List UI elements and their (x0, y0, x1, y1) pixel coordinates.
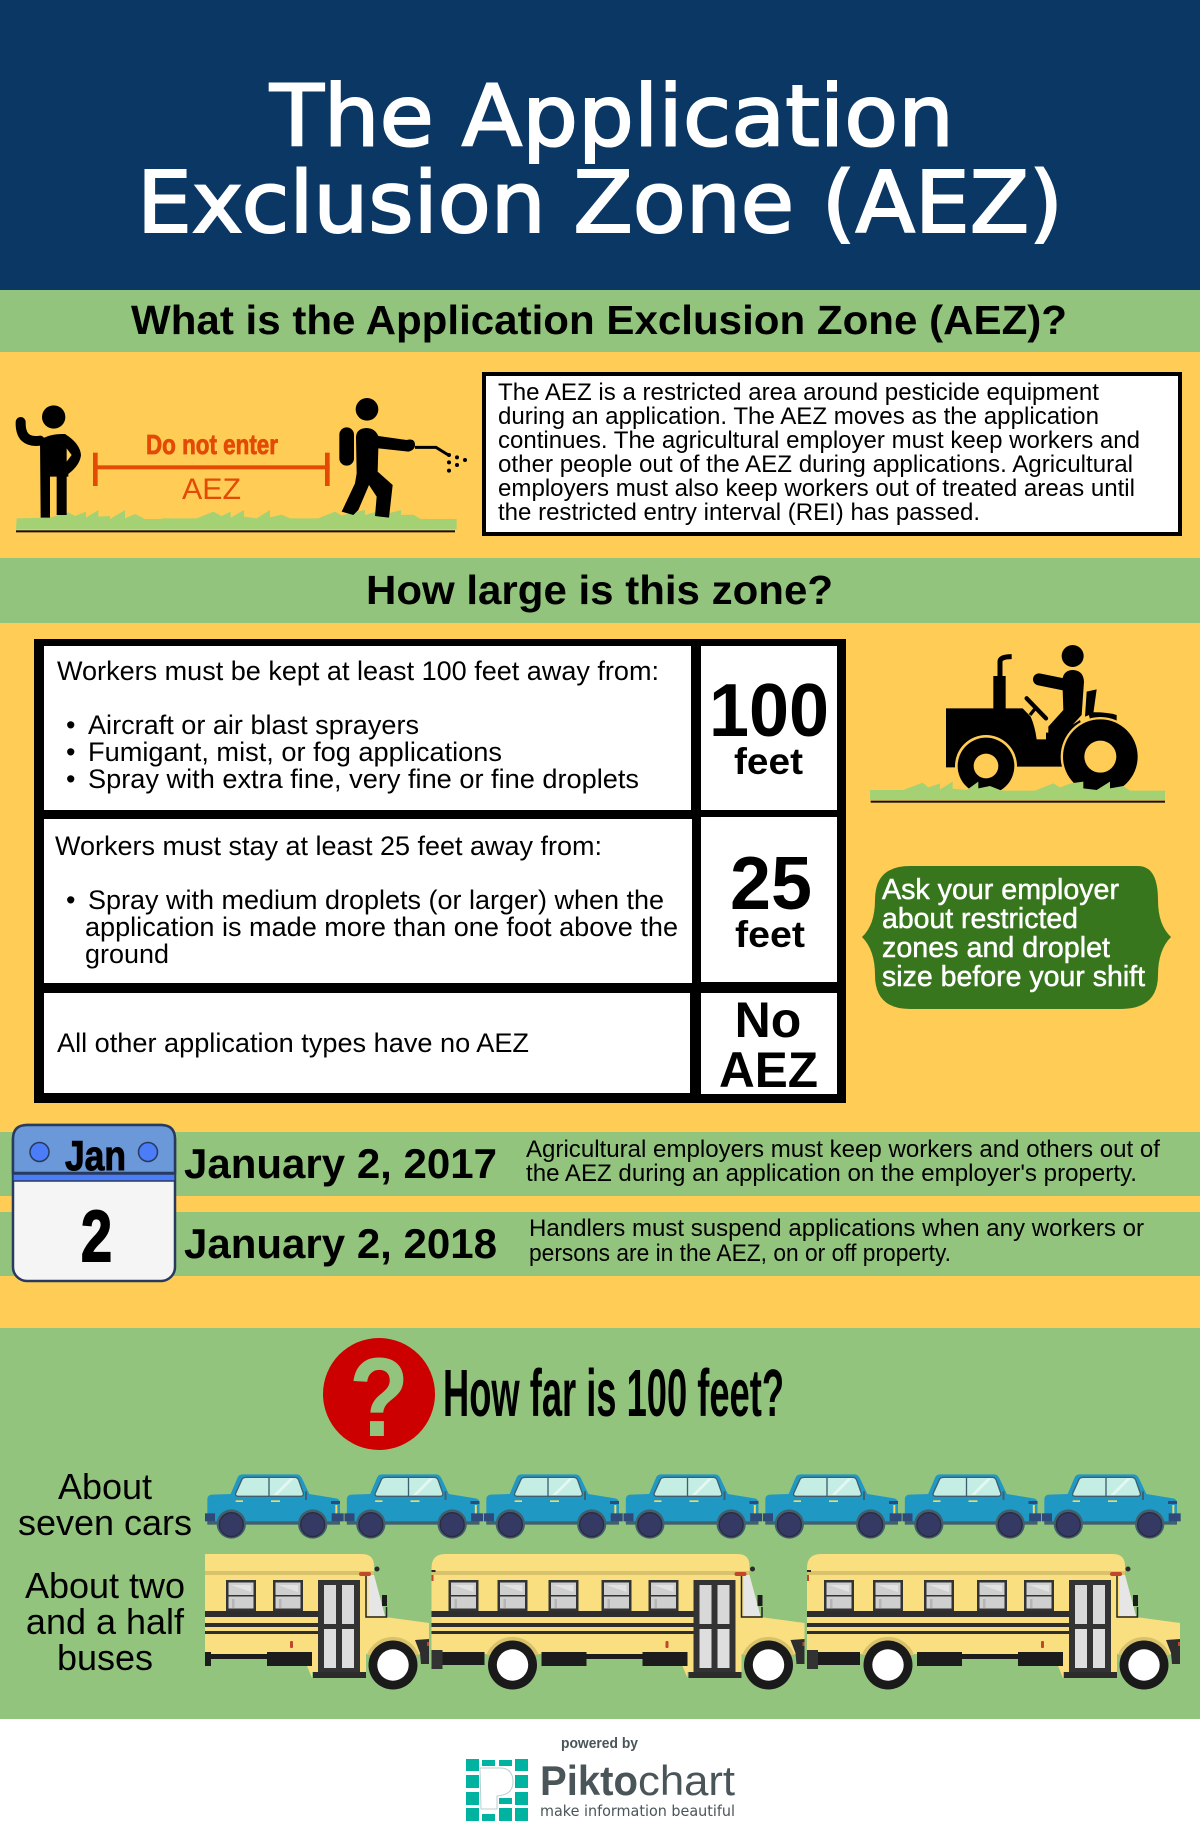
row: 100 feet: • (66, 737, 75, 767)
icon: calendar: 2 (81, 1197, 112, 1277)
footer: Piktochart: Pikto (540, 1757, 638, 1804)
band: January 2, 2018: January 2, 2018 (184, 1220, 497, 1267)
row: 25 feet: Spray with medium droplets (or larger) when the (88, 885, 664, 915)
row: 100 feet: • (66, 710, 75, 740)
row: 100 feet: feet (734, 741, 803, 782)
band: January 2, 2017: the AEZ during an application on the employer's property. (526, 1160, 1137, 1187)
row: 100 feet: Workers must be kept at least 100 feet away from: (57, 656, 659, 686)
row: 25 feet (44, 817, 837, 983)
panel: zone sizes (0, 623, 1200, 1328)
panel: AEZ definition (0, 352, 1200, 558)
text box: AEZ definition: during an application. The AEZ moves as the application (498, 403, 1099, 430)
band: January 2, 2018 (0, 1212, 1200, 1276)
row: two and a half buses (205, 1554, 1180, 1690)
icon: Piktochart logo (466, 1759, 528, 1821)
band: January 2, 2018: Handlers must suspend applications when any workers or (529, 1215, 1144, 1242)
row: 100 feet: 100 (709, 668, 829, 752)
heading: how far: How far is 100 feet? (443, 1356, 784, 1431)
title: The Application (269, 68, 954, 166)
row: 25 feet: • (66, 885, 75, 915)
footer: Piktochart: powered by (561, 1735, 639, 1752)
panel: what is the AEZ heading (0, 290, 1200, 352)
callout: ask your employer: about restricted (882, 903, 1078, 935)
label: about seven cars: About (58, 1466, 152, 1507)
text box: AEZ definition: The AEZ is a restricted area around pesticide equipment (498, 379, 1099, 406)
row: 25 feet: feet (735, 914, 805, 955)
text box: AEZ definition: other people out of the AEZ during applications. Agricultural (498, 451, 1133, 478)
row: 100 feet (44, 646, 837, 810)
callout: ask your employer: Ask your employer (882, 874, 1119, 906)
text box: AEZ definition (484, 374, 1180, 534)
row: 25 feet: 25 (730, 841, 812, 925)
callout: ask your employer: zones and droplet (882, 932, 1110, 964)
heading: how large: How large is this zone? (366, 567, 833, 613)
title: Exclusion Zone (AEZ) (137, 154, 1063, 253)
band: January 2, 2017 (0, 1132, 1200, 1196)
callout: ask your employer: size before your shift (882, 961, 1145, 993)
row: no AEZ: All other application types have no AEZ (57, 1028, 529, 1058)
label: AEZ: AEZ (182, 473, 241, 506)
footer: Piktochart: chart (638, 1757, 735, 1804)
band: January 2, 2018: persons are in the AEZ, on or off property. (529, 1240, 951, 1267)
label: about two and a half buses: and a half (26, 1601, 185, 1642)
row: 25 feet: ground (85, 939, 169, 969)
footer: Piktochart (466, 1735, 735, 1821)
heading: what is the AEZ: What is the Application Exclusion Zone (AEZ)? (131, 297, 1067, 343)
text box: AEZ definition: the restricted entry interval (REI) has passed. (498, 499, 980, 526)
callout: ask your employer (862, 866, 1171, 1009)
band: January 2, 2017: Agricultural employers must keep workers and others out of (526, 1136, 1160, 1163)
row: no AEZ: No (735, 992, 801, 1048)
text box: AEZ definition: continues. The agricultural employer must keep workers and (498, 427, 1140, 454)
panel: how far is 100 feet (0, 1328, 1200, 1719)
panel: header (0, 0, 1200, 290)
row: 25 feet: Workers must stay at least 25 feet away from: (55, 831, 602, 861)
row: 100 feet: Spray with extra fine, very fine or fine droplets (88, 764, 639, 794)
icon: question mark (323, 1335, 435, 1460)
row: 100 feet: Aircraft or air blast sprayers (88, 710, 419, 740)
table: distances (34, 639, 846, 1103)
label: about two and a half buses (25, 1565, 185, 1678)
label: do not enter: Do not enter (146, 429, 278, 460)
illustration: worker, AEZ distance and sprayer (16, 398, 467, 532)
icon: question mark: ? (349, 1335, 409, 1460)
row: 25 feet: application is made more than one foot above the (85, 912, 678, 942)
text box: AEZ definition: employers must also keep workers out of treated areas until (498, 475, 1135, 502)
label: about seven cars (18, 1466, 192, 1543)
row: 100 feet: • (66, 764, 75, 794)
icon: calendar (13, 1125, 175, 1281)
row: seven cars (205, 1474, 1181, 1539)
band: January 2, 2017: January 2, 2017 (184, 1140, 497, 1187)
panel: how large heading (0, 558, 1200, 623)
label: about two and a half buses: buses (57, 1637, 153, 1678)
row: no AEZ (44, 992, 837, 1098)
footer: Piktochart: make information beautiful (540, 1802, 735, 1820)
label: about seven cars: seven cars (18, 1502, 192, 1543)
icon: calendar: Jan (65, 1132, 126, 1179)
icon: tractor (870, 645, 1165, 803)
label: about two and a half buses: About two (25, 1565, 185, 1606)
row: no AEZ: AEZ (719, 1042, 818, 1098)
row: 100 feet: Fumigant, mist, or fog applications (88, 737, 502, 767)
